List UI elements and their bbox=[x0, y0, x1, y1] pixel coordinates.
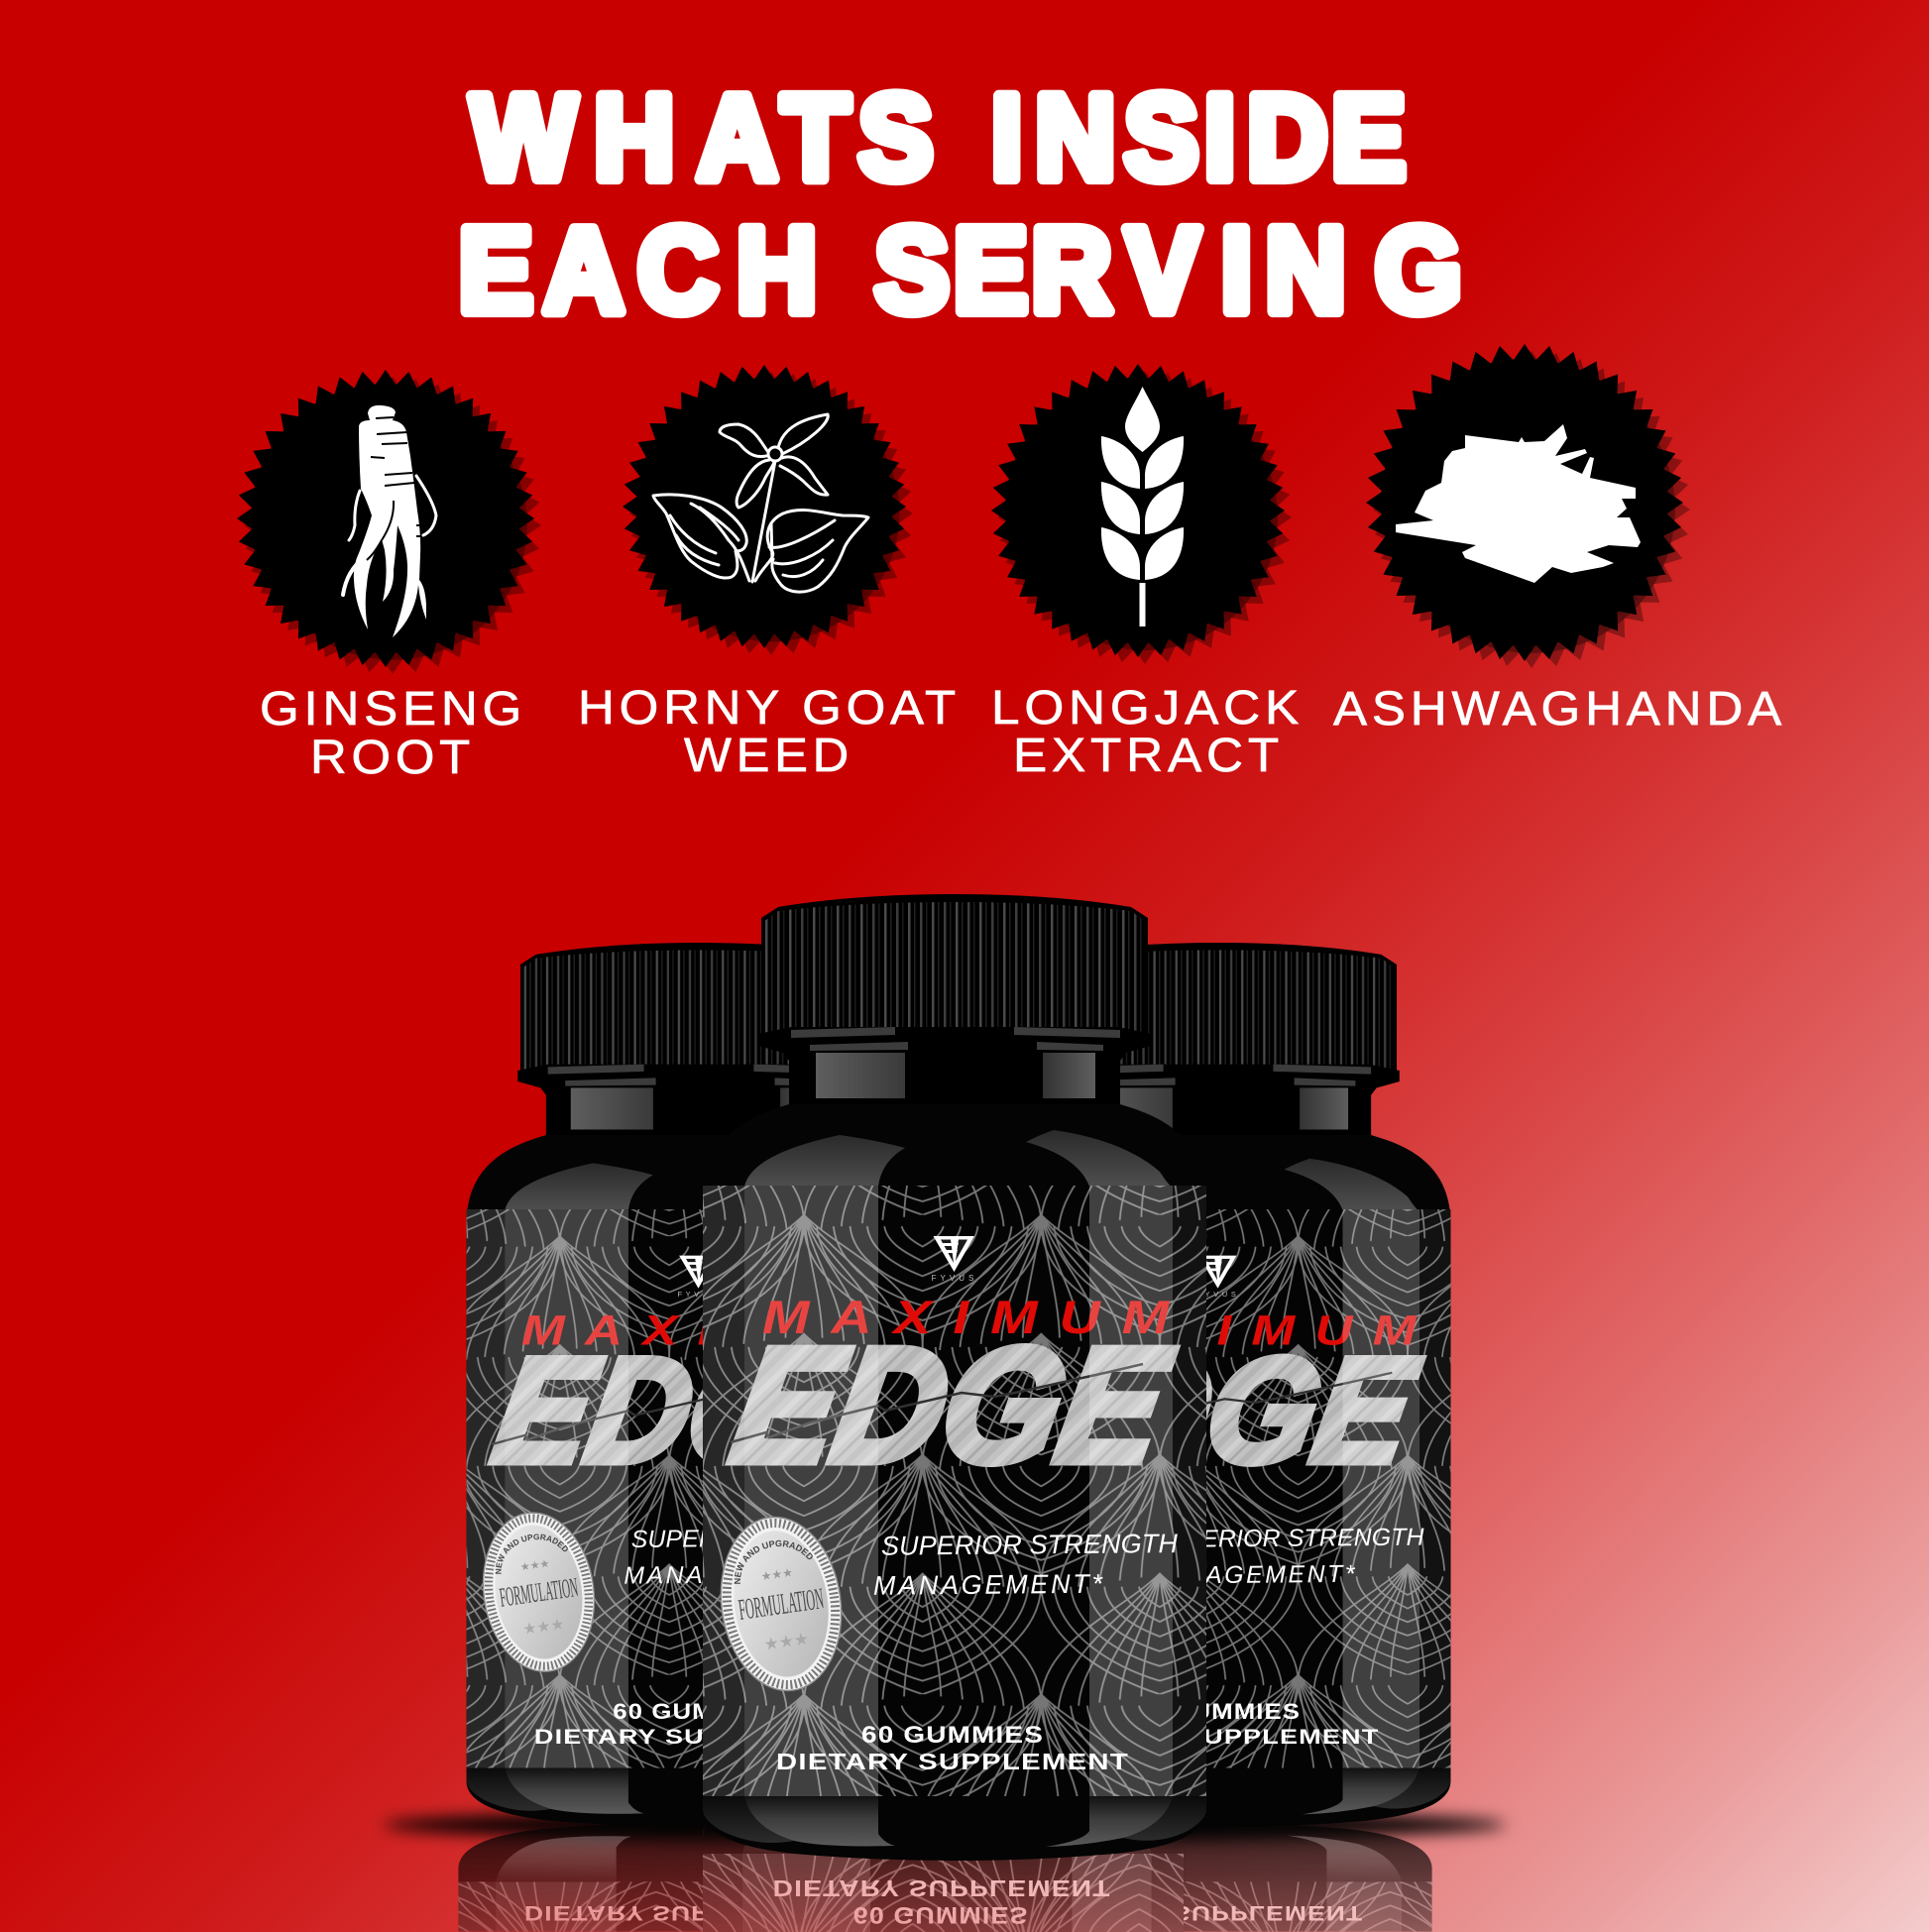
reflection: right bottle bbox=[1184, 1826, 1432, 1932]
icon: ginseng root bbox=[343, 405, 436, 637]
seal: new and upgraded formulation: FORMULATION bbox=[737, 1582, 826, 1627]
label: ashwaghanda: ASHWAGHANDA bbox=[1333, 683, 1786, 736]
tagline bbox=[873, 1529, 1180, 1601]
bottle: center bbox=[703, 894, 1206, 1861]
bottle cap bbox=[761, 894, 1148, 1035]
bottle neck and lip bbox=[758, 1027, 1151, 1117]
ingredient: horny goat weed bbox=[578, 365, 961, 782]
icon: ashwaghanda root pile bbox=[1396, 424, 1641, 583]
seal: new and upgraded formulation: ★★★ bbox=[760, 1565, 794, 1583]
ingredient: longjack extract bbox=[991, 364, 1304, 782]
label: horny goat weed: HORNY GOAT bbox=[578, 682, 961, 735]
label: longjack extract bbox=[991, 682, 1304, 782]
label: horny goat weed: WEED bbox=[684, 730, 853, 782]
count and supplement text: 60 GUMMIES bbox=[861, 1722, 1044, 1749]
label panel bbox=[703, 1186, 1206, 1796]
brand logo bbox=[932, 1236, 977, 1283]
seal: new and upgraded formulation: ★★★ bbox=[762, 1630, 810, 1655]
bottle: left bbox=[467, 943, 931, 1827]
tagline: MANAGEMENT* bbox=[873, 1569, 1104, 1601]
label: horny goat weed bbox=[578, 682, 961, 782]
badge: ashwaghanda burst bbox=[1366, 344, 1690, 668]
badge: horny goat weed burst bbox=[623, 365, 913, 655]
title: WHATS INSIDE bbox=[471, 70, 1406, 204]
title: EACH SERVING bbox=[459, 203, 1462, 337]
title bbox=[459, 70, 1462, 337]
icon: horny goat weed plant bbox=[653, 414, 868, 592]
label: ginseng root bbox=[260, 683, 526, 784]
ingredient: ashwaghanda bbox=[1333, 344, 1786, 736]
tagline: SUPERIOR STRENGTH bbox=[881, 1529, 1180, 1561]
shoulder highlights bbox=[744, 1130, 1171, 1187]
label: longjack extract: EXTRACT bbox=[1013, 730, 1284, 782]
label: longjack extract: LONGJACK bbox=[991, 682, 1304, 735]
count and supplement text: DIETARY SUPPLEMENT bbox=[776, 1749, 1129, 1774]
seal: new and upgraded formulation bbox=[720, 1517, 843, 1691]
product name: edge: EDGE bbox=[722, 1314, 1182, 1497]
reflection: center bottle bbox=[702, 1828, 1184, 1932]
reflection: left bottle bbox=[458, 1824, 703, 1932]
badge: longjack burst bbox=[991, 364, 1292, 664]
reflection: center bottle: 60 GUMMIES bbox=[853, 1902, 1028, 1928]
label: ginseng root: ROOT bbox=[310, 732, 475, 784]
brand logo: FYVUS bbox=[932, 1274, 977, 1283]
count and supplement text bbox=[776, 1722, 1129, 1774]
bottom highlights bbox=[703, 1796, 1206, 1847]
label: ginseng root: GINSENG bbox=[260, 683, 526, 736]
bottle body bbox=[703, 1104, 1206, 1861]
badge: ginseng burst bbox=[237, 370, 541, 674]
bottle: right bbox=[986, 943, 1450, 1827]
icon: wheat stalk bbox=[1101, 387, 1184, 626]
product name: maximum: MAXIMUM bbox=[762, 1291, 1191, 1343]
seal: new and upgraded formulation: NEW AND UPGRADED bbox=[734, 1540, 813, 1584]
ingredient: ginseng root bbox=[237, 370, 541, 784]
floor shadow bbox=[384, 1809, 1506, 1841]
